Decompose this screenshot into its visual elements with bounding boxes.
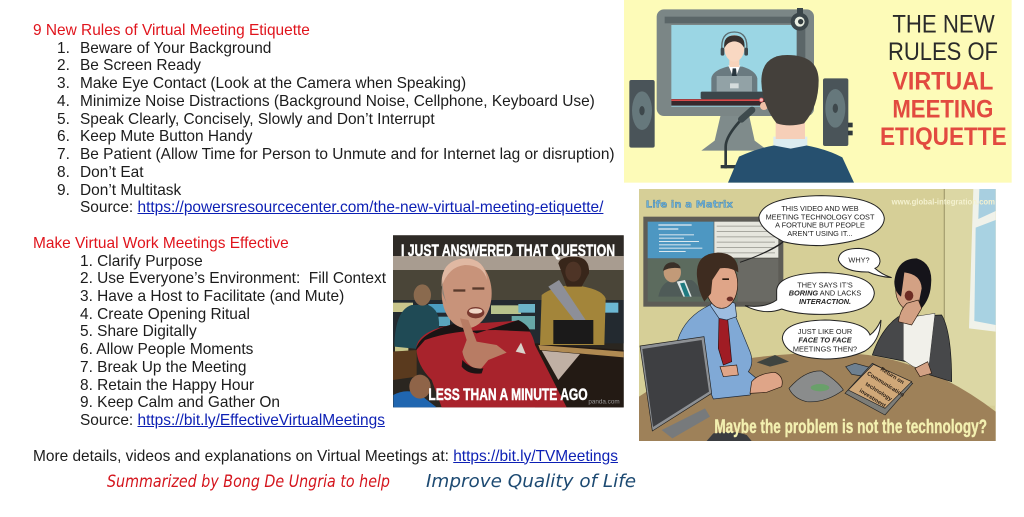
rule 4: 4.: [57, 93, 70, 110]
speech bubble: technology cost: MEETING TECHNOLOGY COST: [766, 212, 875, 221]
signature line: Improve Quality of Life: [426, 472, 636, 492]
rule 4: Minimize Noise Distractions (Background Noise, Cellphone, Keyboard Use): [80, 93, 595, 110]
figure: viewer seen from behind: [728, 55, 854, 183]
speech bubble: boring: THEY SAYS IT’S: [797, 280, 853, 289]
rule 6: 6.: [57, 128, 70, 145]
panel: Picard meme: [393, 235, 624, 408]
icon: microphone: [721, 110, 752, 168]
speech bubble: technology cost: AREN’T USING IT...: [787, 229, 853, 238]
report book: technology: [864, 382, 893, 403]
banner title text: RULES OF: [888, 38, 998, 66]
figure: man in blue shirt and red tie: [678, 253, 782, 399]
source link 2: Source: https://bit.ly/EffectiveVirtualMeetings: [80, 412, 385, 429]
signature line: Summarized by Bong De Ungria to help: [107, 472, 390, 491]
speech bubble: face to face: JUST LIKE OUR: [798, 327, 852, 336]
panel: life in a matrix cartoon: [639, 189, 996, 441]
speech bubble: face to face: MEETINGS THEN?: [793, 344, 857, 353]
rule 9: Don’t Multitask: [80, 182, 181, 198]
icon: webcam: [791, 8, 809, 31]
banner title text: THE NEW: [892, 10, 995, 38]
report book: investment: [858, 388, 887, 409]
speech bubble: boring: [745, 273, 874, 314]
icon: left speaker: [629, 80, 655, 148]
tablet on table: [846, 363, 871, 376]
speech bubble: why: WHY?: [848, 256, 870, 265]
rule 9: 9.: [57, 182, 70, 198]
text block: 9 new rules of virtual meeting etiquette: [33, 22, 615, 216]
icon: right speaker: [823, 78, 853, 146]
conference speakerphone: [789, 371, 843, 402]
speech bubble: technology cost: A FORTUNE BUT PEOPLE: [775, 221, 865, 230]
desktop monitor: [640, 337, 752, 441]
rule 1: Beware of Your Background: [80, 40, 271, 56]
source link 1: Source: https://powersresourcecenter.com/the-new-virtual-meeting-etiquette/: [80, 199, 603, 216]
speech bubble: technology cost: [740, 196, 884, 262]
rule 8: Don’t Eat: [80, 164, 144, 181]
banner title text: MEETING: [892, 95, 993, 123]
banner title text: ETIQUETTE: [880, 123, 1007, 151]
rule 8: 8.: [57, 164, 70, 181]
item 8: 8. Retain the Happy Hour: [80, 376, 254, 394]
item 3: 3. Have a Host to Facilitate (and Mute): [80, 288, 344, 305]
item 1: 1. Clarify Purpose: [80, 252, 203, 270]
rule 7: 7.: [57, 146, 70, 163]
rule 6: Keep Mute Button Handy: [80, 128, 252, 145]
speech bubble: boring: INTERACTION.: [799, 297, 851, 306]
rule 2: Be Screen Ready: [80, 57, 201, 74]
logo: life in a matrix: Life in a Matrix: [646, 200, 734, 211]
signature line: [107, 472, 636, 492]
figure: woman in dark jacket: [872, 258, 952, 382]
icon: monitor with video call: [657, 9, 814, 116]
icon: monitor stand: [701, 115, 768, 151]
report book: [845, 363, 913, 415]
url label: www.global-integration.com: [891, 196, 995, 206]
speech bubble: face to face: [782, 320, 881, 359]
item 5: 5. Share Digitally: [80, 323, 197, 340]
rule 1: 1.: [57, 40, 70, 56]
rule 3: Make Eye Contact (Look at the Camera when Speaking): [80, 75, 466, 92]
rule 3: 3.: [57, 75, 70, 92]
rule 7: Be Patient (Allow Time for Person to Unmute and for Internet lag or disruption): [80, 146, 615, 163]
item 6: 6. Allow People Moments: [80, 341, 253, 358]
item 4: 4. Create Opening Ritual: [80, 306, 250, 322]
rule 2: 2.: [57, 57, 70, 74]
speech bubble: boring: BORING AND LACKS: [789, 289, 861, 298]
meme watermark: panda.com: [588, 399, 620, 406]
heading: Make Virtual Work Meetings Effective: Make Virtual Work Meetings Effective: [33, 234, 289, 252]
speech bubble: face to face: FACE TO FACE: [798, 336, 853, 345]
item 9: 9. Keep Calm and Gather On: [80, 394, 280, 411]
wall screen showing presentation: [643, 217, 783, 307]
item 2: 2. Use Everyone’s Environment: Fill Context: [80, 270, 386, 287]
heading: 9 New Rules: 9 New Rules of Virtual Meeting Etiquette: [33, 22, 310, 38]
table: [639, 353, 996, 441]
banner title text: VIRTUAL: [892, 67, 993, 95]
item 7: 7. Break Up the Meeting: [80, 359, 246, 376]
banner title text: [880, 10, 1007, 151]
speech bubble: technology cost: THIS VIDEO AND WEB: [781, 204, 859, 213]
rule 5: 5.: [57, 110, 70, 128]
more details line: More details, videos and explanations on Virtual Meetings at: https://bit.ly/TVMeetings: [33, 448, 618, 464]
report book: Return on: [879, 367, 905, 386]
report book: Communication: [866, 371, 905, 399]
panel: the new rules of virtual meeting etiquette banner: [624, 0, 1012, 183]
speech bubble: why: [838, 248, 892, 278]
text block: make virtual work meetings effective: [33, 234, 386, 429]
rule 5: Speak Clearly, Concisely, Slowly and Don’t Interrupt: [80, 110, 435, 128]
phone on table: [757, 355, 789, 367]
